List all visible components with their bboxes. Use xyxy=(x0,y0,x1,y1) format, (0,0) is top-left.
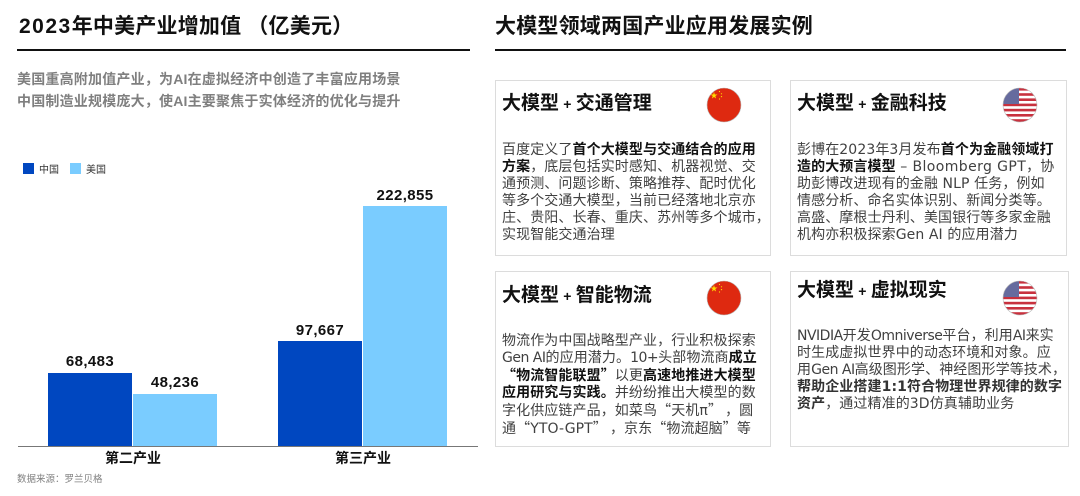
axis label: tertiary industry: 第三产业 xyxy=(335,450,391,466)
card heading: 大模型 + 虚拟现实 xyxy=(797,280,947,301)
card body text: 助彭博改进现有的金融 NLP 任务，例如 xyxy=(797,176,1045,192)
card body text: 造的大预言模型 – Bloomberg GPT，协 xyxy=(797,159,1054,175)
bar: USA secondary xyxy=(133,394,217,446)
bar: China secondary xyxy=(48,373,132,446)
text block: chart summary: 中国制造业规模庞大，使AI主要聚焦于实体经济的优化与提升 xyxy=(17,93,401,109)
card body text xyxy=(502,142,770,243)
card body text: 时生成虚拟世界中的动态环境和对象。应 xyxy=(797,345,1051,361)
card body text: NVIDIA开发Omniverse平台，利用AI来实 xyxy=(797,328,1054,344)
legend xyxy=(23,163,106,176)
card body text: 彭博在2023年3月发布首个为金融领域打 xyxy=(797,142,1054,158)
card body text: 等多个交通大模型，当前已经落地北京亦 xyxy=(502,193,756,209)
bar chart xyxy=(18,187,478,466)
bar group: secondary industry xyxy=(48,353,217,446)
card body text: 庄、贵阳、长春、重庆、苏州等多个城市， xyxy=(502,210,770,226)
legend item: China: 中国 xyxy=(39,165,59,176)
card body text: 物流作为中国战略型产业，行业积极探索 xyxy=(502,333,756,349)
card body text: 方案，底层包括实时感知、机器视觉、交 xyxy=(502,159,756,175)
axis label: secondary industry: 第二产业 xyxy=(105,450,161,466)
card body text: 应用研究与实践。并纷纷推出大模型的数 xyxy=(502,385,756,401)
card body text xyxy=(797,142,1054,243)
card body text: 百度定义了首个大模型与交通结合的应用 xyxy=(502,142,756,158)
card body text: 资产，通过精准的3D仿真辅助业务 xyxy=(797,396,1014,412)
card body text: Gen AI的应用潜力。10+头部物流商成立 xyxy=(502,350,757,366)
card body text: 字化供应链产品，如菜鸟“天机π” ，圆 xyxy=(502,400,753,420)
card heading: 大模型 + 金融科技 xyxy=(797,93,947,114)
bar group: tertiary industry xyxy=(278,187,447,446)
legend item: China xyxy=(23,163,59,176)
value: China secondary: 68,483 xyxy=(66,353,114,370)
icon: US flag xyxy=(1002,88,1038,122)
title: right section heading: 大模型领域两国产业应用发展实例 xyxy=(495,15,813,38)
source note: 数据来源：罗兰贝格 xyxy=(17,474,103,485)
card body text: 高盛、摩根士丹利、美国银行等多家金融 xyxy=(797,210,1051,226)
bar: China tertiary xyxy=(278,341,362,446)
card heading: 大模型 + 智能物流 xyxy=(502,285,652,306)
card body text xyxy=(797,328,1066,412)
text block: chart summary: 美国重高附加值产业，为AI在虚拟经济中创造了丰富应用场景 xyxy=(17,71,401,87)
text block: chart summary xyxy=(17,71,401,109)
card body text: 情感分析、命名实体识别、新闻分类等。 xyxy=(797,193,1051,209)
value: USA secondary: 48,236 xyxy=(151,374,199,391)
panel: smart logistics xyxy=(495,271,771,447)
value: USA tertiary: 222,855 xyxy=(376,187,434,204)
panel: traffic management xyxy=(495,80,771,256)
card heading: 大模型 + 交通管理 xyxy=(502,93,652,114)
bar: USA tertiary xyxy=(363,206,447,446)
icon: US flag xyxy=(1002,280,1038,316)
icon: China flag xyxy=(706,280,742,316)
card body text xyxy=(502,332,757,438)
value: China tertiary: 97,667 xyxy=(296,322,344,339)
card body text: 通“YTO-GPT” ，京东“物流超脑”等 xyxy=(502,418,751,438)
card body text: 帮助企业搭建1:1符合物理世界规律的数字 xyxy=(797,379,1062,395)
card body text: 通预测、问题诊断、策略推荐、配时优化 xyxy=(502,176,756,192)
icon: China flag xyxy=(706,88,742,122)
panel: fintech xyxy=(790,80,1067,256)
card body text: 实现智能交通治理 xyxy=(502,227,615,243)
legend item: USA xyxy=(70,163,106,176)
panel: virtual reality xyxy=(790,271,1069,447)
card body text: 机构亦积极探索Gen AI 的应用潜力 xyxy=(797,227,1018,243)
card body text: 用Gen AI高级图形学、神经图形学等技术， xyxy=(797,362,1066,378)
legend item: USA: 美国 xyxy=(86,165,106,176)
title: left chart heading: 2023年中美产业增加值 （亿美元） xyxy=(19,15,353,38)
card body text: “物流智能联盟”以更高速地推进大模型 xyxy=(502,365,756,385)
